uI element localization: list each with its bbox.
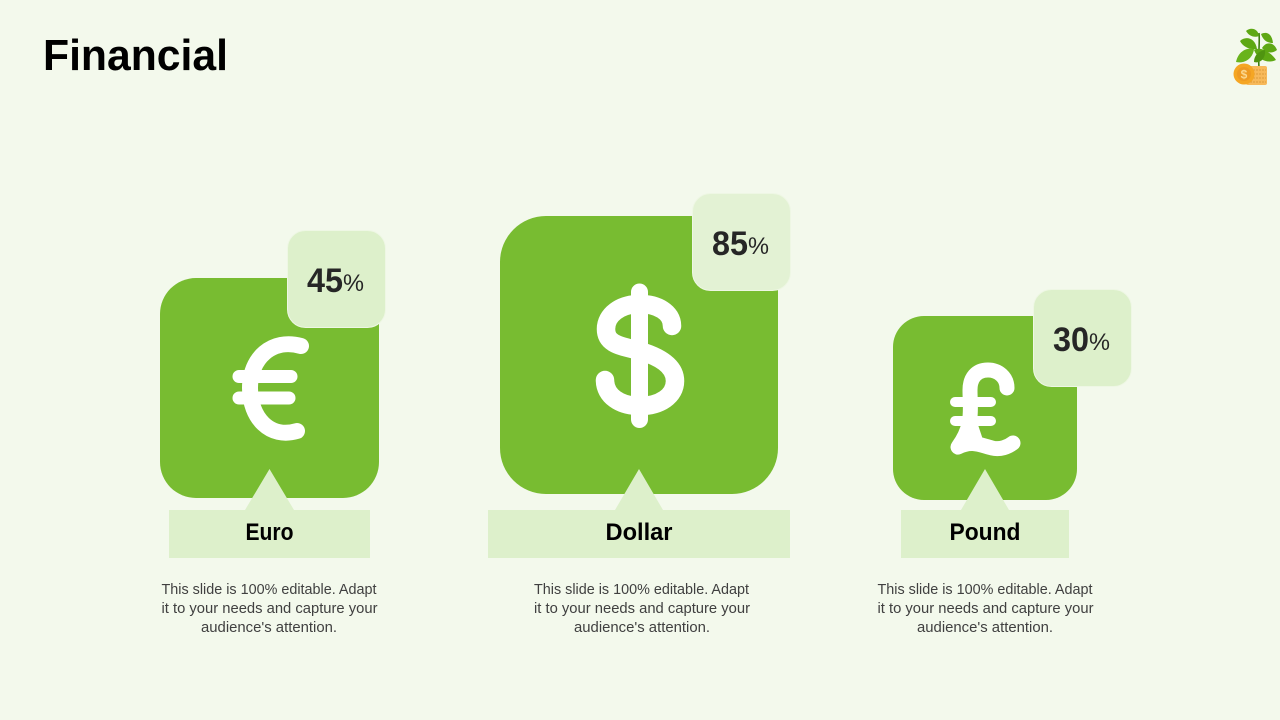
panel: Pound xyxy=(878,290,1132,636)
dollar percentage badge: % xyxy=(748,233,769,260)
euro description xyxy=(162,582,378,636)
pound description: audience's attention. xyxy=(917,620,1053,636)
pound label: Pound xyxy=(950,519,1020,546)
dollar green tile xyxy=(500,216,778,494)
pound description xyxy=(878,582,1094,636)
dollar description: audience's attention. xyxy=(574,620,710,636)
euro green tile xyxy=(160,278,379,498)
dollar percentage badge xyxy=(692,194,790,290)
dollar description xyxy=(534,582,750,636)
icon: euro sign xyxy=(239,344,301,433)
icon: plant growing from coins xyxy=(1234,29,1277,85)
pound label xyxy=(901,469,1069,558)
euro percentage badge: 45 xyxy=(307,262,343,300)
euro description: audience's attention. xyxy=(201,620,337,636)
panel: Dollar xyxy=(488,194,790,636)
pound description: This slide is 100% editable. Adapt xyxy=(878,582,1092,598)
dollar percentage badge: 85 xyxy=(712,225,748,263)
euro percentage badge: % xyxy=(343,270,364,297)
euro description: This slide is 100% editable. Adapt xyxy=(162,582,376,598)
panel: Euro xyxy=(160,230,386,636)
pound green tile xyxy=(893,316,1077,500)
icon: dollar sign xyxy=(605,292,675,420)
pound description: it to your needs and capture your xyxy=(878,601,1094,617)
pound percentage badge xyxy=(1034,290,1132,386)
dollar description: it to your needs and capture your xyxy=(534,601,750,617)
euro label: Euro xyxy=(246,519,294,546)
icon: plant growing from coins: $ xyxy=(1241,68,1248,82)
dollar label: Dollar xyxy=(606,519,672,546)
euro percentage badge xyxy=(288,230,386,328)
dollar description: This slide is 100% editable. Adapt xyxy=(534,582,749,598)
euro description: it to your needs and capture your xyxy=(162,601,378,617)
euro label xyxy=(169,469,370,558)
icon: pound sign xyxy=(955,370,1013,449)
pound percentage badge: % xyxy=(1089,329,1110,356)
dollar label xyxy=(488,469,790,558)
pound percentage badge: 30 xyxy=(1053,321,1089,359)
title: Financial xyxy=(43,31,228,80)
